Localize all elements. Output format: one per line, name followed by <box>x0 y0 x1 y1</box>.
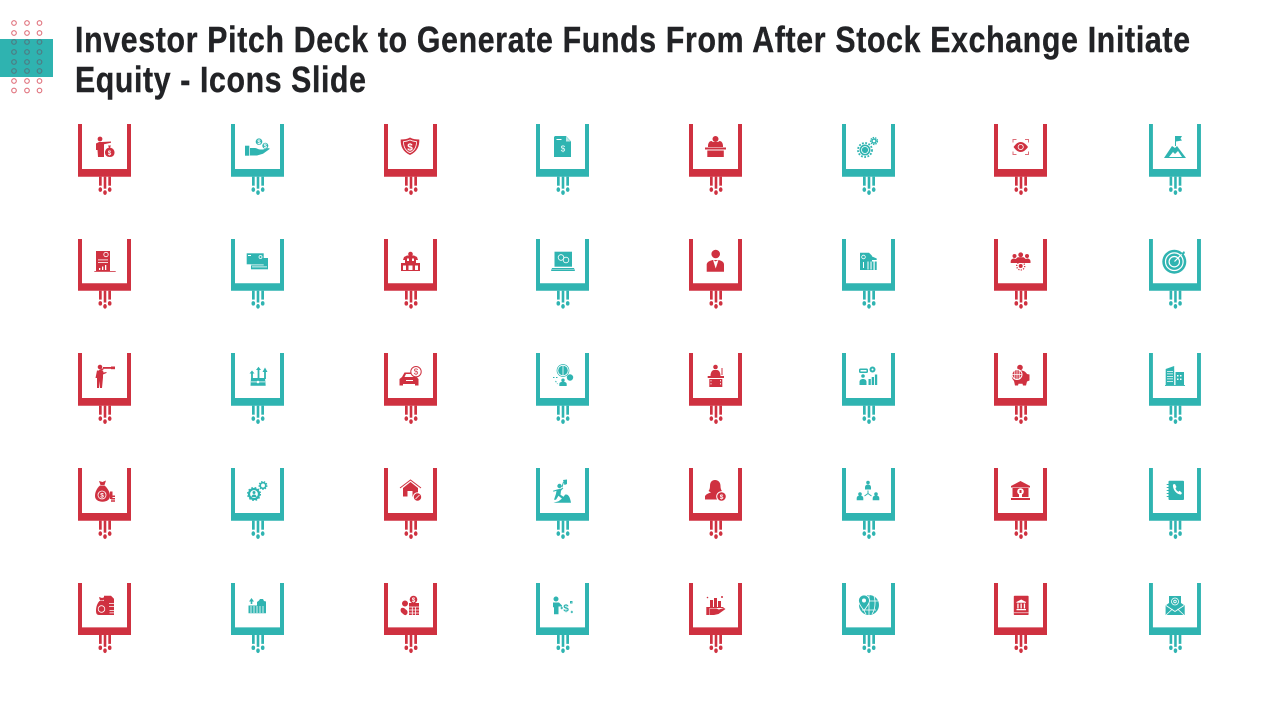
icon tile: woman with dollar: $ <box>720 494 724 501</box>
icon tile: person with dollar signs <box>536 583 589 653</box>
icon tile: document and bank <box>842 239 895 309</box>
title: Equity - Icons Slide <box>75 61 366 101</box>
icon tile: phone book <box>1149 468 1201 539</box>
icon tile: field with houses <box>231 583 284 653</box>
icon tile: money bags and documents <box>78 583 131 653</box>
icon tile: globe network with people <box>536 353 589 424</box>
icon tile: office buildings <box>1149 353 1201 424</box>
icon tile: document with dollar <box>536 124 589 195</box>
icon tile: investor with money bag <box>78 124 131 195</box>
icon tile: globe with location pin <box>842 583 895 653</box>
icon tile: document with dollar: $ <box>561 144 566 154</box>
row 4 <box>78 468 1201 539</box>
icon tile: eye in focus frame <box>994 124 1047 195</box>
icon tile: investor with money bag: $ <box>108 151 112 157</box>
icon tile: presenter at lectern <box>689 353 742 424</box>
icon tile: hand holding coins: $ <box>264 144 268 150</box>
icon tile: credit cards <box>231 239 284 309</box>
icon tile: piggy bank with globe <box>994 353 1047 424</box>
icon tile: hierarchy of people <box>842 468 895 539</box>
icon tile: gears with person <box>231 468 284 539</box>
icon tile: dollar shield <box>384 124 437 195</box>
icon tile: car with dollar coin: $ <box>414 368 419 376</box>
icon tile: laptop with gears <box>536 239 589 309</box>
icon tile: woman with dollar <box>689 468 742 539</box>
icon tile: briefcase with rising arrows <box>231 353 284 424</box>
icon tile: calculator and money: $ <box>412 598 416 604</box>
icon tile: bank with thumbs up <box>994 468 1047 539</box>
icon tile: email envelope <box>1149 583 1201 653</box>
icon tile: hand holding coins: $ <box>257 140 261 146</box>
icon tile: mountain with flag <box>1149 124 1201 195</box>
icon tile: hand holding chart <box>689 583 742 653</box>
icon tile: team group <box>994 239 1047 309</box>
icon tile: calculator and money <box>384 583 437 653</box>
icon tile: car with dollar coin <box>384 353 437 424</box>
icon tile: financial report <box>78 239 131 309</box>
row 2 <box>78 239 1201 309</box>
icon tile: businessman <box>689 239 742 309</box>
icon tile: people with chart and gear <box>842 353 895 424</box>
icon tile: speaker at podium <box>689 124 742 195</box>
icon tile: gears with dollar <box>842 124 895 195</box>
title: Investor Pitch Deck to Generate Funds From After Stock Exchange Initiate <box>75 21 1190 61</box>
icon tile: hand holding coins <box>231 124 284 195</box>
icon tile: target with arrow <box>1149 239 1201 309</box>
icon tile: person with dollar signs: $ <box>563 604 569 614</box>
icon tile: climber with flag <box>536 468 589 539</box>
icon tile: money bag and coins <box>78 468 131 539</box>
icon tile: bank building <box>384 239 437 309</box>
decorative teal block with dot grid <box>0 21 53 93</box>
icon tile: man with telescope <box>78 353 131 424</box>
icon tile: money bag and coins: $ <box>100 492 104 500</box>
row 3 <box>78 353 1201 424</box>
icon tile: bank on tablet <box>994 583 1047 653</box>
icon tile: dollar shield: $ <box>407 142 413 154</box>
row 5 <box>78 583 1201 653</box>
icon tile: house with percent <box>384 468 437 539</box>
title <box>75 21 1190 101</box>
row 1 <box>78 124 1201 195</box>
